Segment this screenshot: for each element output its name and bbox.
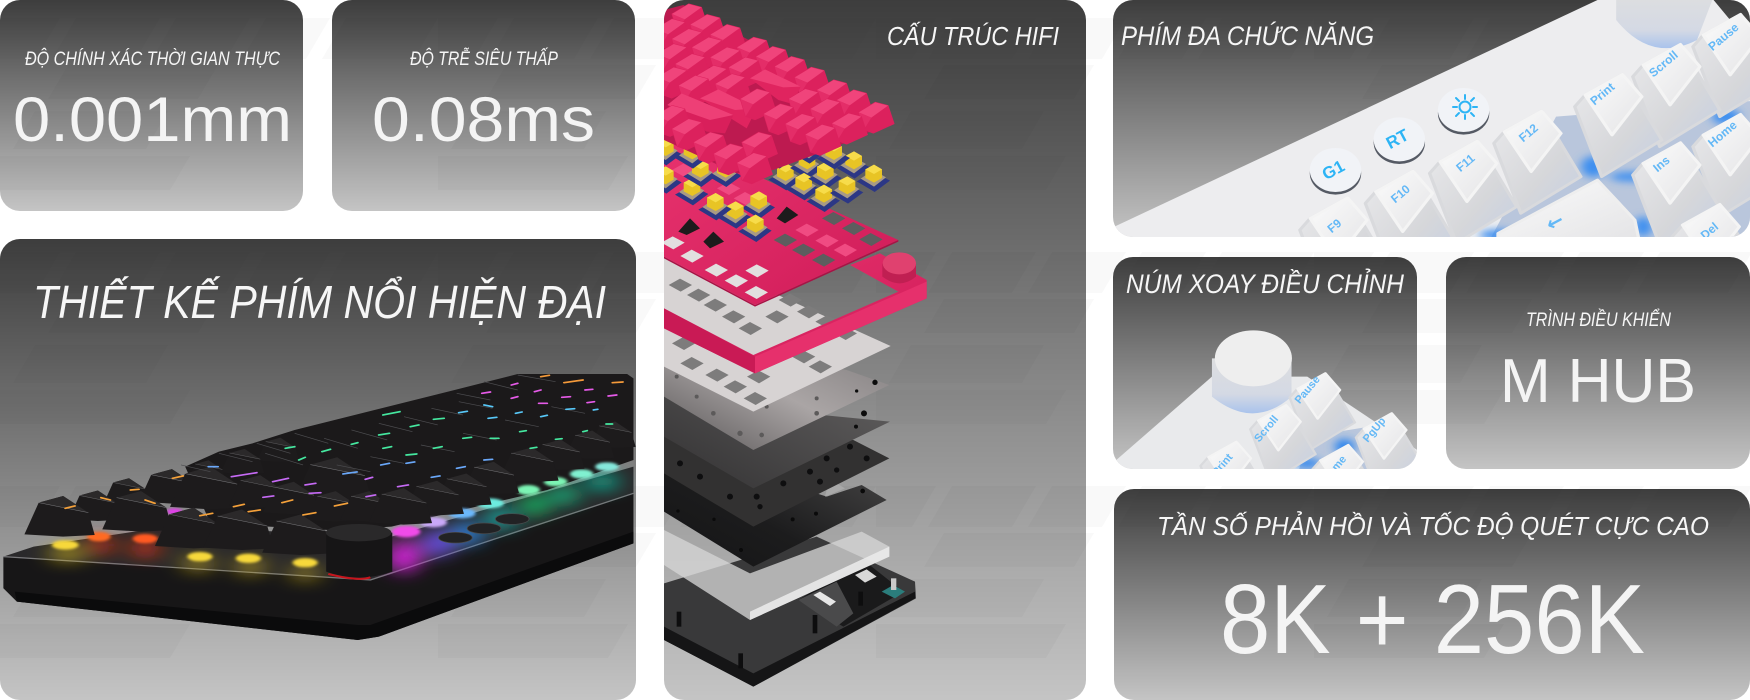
panel: real-time accuracy	[0, 0, 303, 211]
key legends: F11	[1453, 151, 1478, 175]
key legends: PgUp	[1361, 415, 1389, 445]
panel: modern raised key design	[0, 239, 636, 700]
panel background	[0, 239, 636, 700]
title: CẤU TRÚC HIFI	[887, 21, 1059, 51]
panel background	[1114, 489, 1750, 700]
panel background	[1446, 257, 1750, 469]
title: THIẾT KẾ PHÍM NỔI HIỆN ĐẠI	[33, 276, 606, 328]
panel: ultra low latency	[332, 0, 635, 211]
image: black RGB keyboard	[3, 374, 636, 640]
key legends: ←	[1542, 207, 1568, 236]
panel: M HUB driver	[1446, 257, 1750, 469]
panel background	[0, 0, 303, 211]
key legends: F10	[1388, 182, 1413, 206]
key legends: Pause	[1705, 20, 1742, 54]
key legends: Scroll	[1646, 48, 1681, 80]
key legends: Home	[1320, 454, 1349, 485]
label: latency: ĐỘ TRỄ SIÊU THẤP	[410, 48, 558, 70]
number: 8K + 256K: 8K + 256K	[1220, 564, 1645, 674]
image: exploded keyboard layers	[648, 4, 927, 687]
number: 0.001mm: 0.001mm	[13, 85, 292, 155]
panel background	[1113, 257, 1417, 469]
number: M HUB: M HUB	[1500, 347, 1696, 416]
key legends: F9	[1325, 216, 1345, 236]
key legends: Ins	[1650, 153, 1673, 175]
title: NÚM XOAY ĐIỀU CHỈNH	[1126, 267, 1404, 299]
key legends: Scroll	[1252, 414, 1281, 445]
key legends: Print	[1587, 80, 1617, 108]
label: accuracy: ĐỘ CHÍNH XÁC THỜI GIAN THỰC	[25, 48, 280, 70]
key legends: RT	[1383, 125, 1412, 153]
panel background	[664, 0, 1086, 700]
image: white knob and keys	[1112, 330, 1421, 522]
icon: brightness sun	[1453, 95, 1477, 119]
key legends: G1	[1319, 156, 1348, 184]
number: 0.08ms: 0.08ms	[372, 85, 595, 155]
key legends: Print	[1210, 451, 1236, 479]
label: driver: TRÌNH ĐIỀU KHIỂN	[1526, 309, 1671, 331]
panel background	[1113, 0, 1750, 237]
key legends: Home	[1705, 118, 1740, 150]
key legends: Pause	[1293, 374, 1323, 406]
key legends	[1214, 377, 1385, 469]
image: white keyboard with function buttons	[1115, 0, 1750, 307]
key legends: F12	[1516, 121, 1541, 145]
panel: polling and scan rate	[1114, 489, 1750, 700]
key legends: Del	[1698, 220, 1721, 242]
title: PHÍM ĐA CHỨC NĂNG	[1121, 20, 1374, 51]
key legends	[1319, 20, 1742, 242]
panel background	[332, 0, 635, 211]
panel: adjustment knob	[1112, 257, 1421, 522]
panel: HiFi structure	[648, 0, 1086, 700]
label: polling: TẦN SỐ PHẢN HỒI VÀ TỐC ĐỘ QUÉT CỰC CAO	[1157, 510, 1709, 541]
panel: multifunction keys	[1113, 0, 1750, 307]
